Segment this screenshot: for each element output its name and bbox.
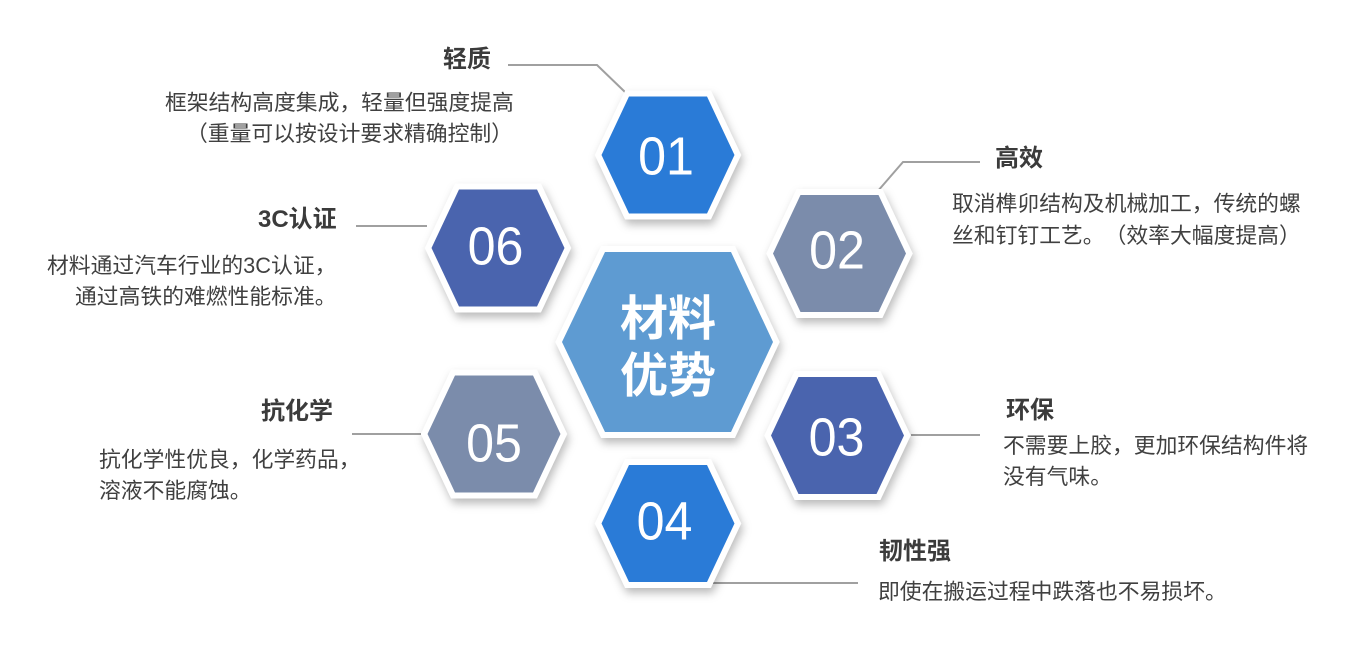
- text block 01: （重量可以按设计要求精确控制）: [186, 121, 513, 146]
- text block 04: 韧性强: [879, 538, 951, 565]
- leader line 01: [508, 65, 625, 92]
- central hexagon: 材料: [620, 293, 716, 346]
- hexagon 04: 04: [637, 492, 692, 552]
- hexagon 06: [432, 190, 564, 306]
- leader line 03: [911, 434, 980, 436]
- text block 05: [99, 398, 361, 503]
- leader line 06: [356, 225, 427, 227]
- text block 03: 环保: [1006, 397, 1054, 424]
- central hexagon: 优势: [620, 350, 716, 403]
- text block 01: 轻质: [443, 46, 491, 73]
- text block 02: 丝和钉钉工艺。（效率大幅度提高）: [952, 223, 1301, 248]
- text block 05: 抗化学: [261, 398, 333, 425]
- hexagon 03: 03: [809, 408, 864, 468]
- text block 05: 抗化学性优良，化学药品，: [99, 447, 361, 472]
- leader line 02: [877, 162, 980, 192]
- hexagon 01: 01: [638, 127, 694, 187]
- text block 02: 取消榫卯结构及机械加工，传统的螺: [952, 191, 1301, 216]
- leader line 05: [352, 433, 421, 435]
- text block 06: 3C认证: [258, 206, 337, 233]
- text block 06: [47, 206, 337, 309]
- leader line 04: [713, 582, 858, 584]
- text block 06: 通过高铁的难燃性能标准。: [75, 284, 337, 309]
- text block 02: [952, 145, 1301, 248]
- hexagon 01: [602, 96, 734, 214]
- hexagon 05: [428, 376, 560, 492]
- hexagon 02: [773, 195, 906, 312]
- central hexagon: [562, 252, 773, 432]
- hexagon 04: [602, 465, 734, 582]
- text block 01: [165, 46, 514, 146]
- hexagon 02: 02: [809, 221, 865, 281]
- text block 03: [1003, 397, 1308, 489]
- hexagon 06: 06: [468, 217, 523, 277]
- text block 01: 框架结构高度集成，轻量但强度提高: [165, 90, 514, 115]
- text block 06: 材料通过汽车行业的3C认证，: [47, 253, 336, 278]
- text block 04: [878, 538, 1227, 604]
- text block 05: 溶液不能腐蚀。: [99, 478, 252, 503]
- hexagon 05: 05: [466, 414, 522, 474]
- text block 02: 高效: [995, 145, 1043, 172]
- text block 03: 不需要上胶，更加环保结构件将: [1003, 433, 1308, 458]
- text block 04: 即使在搬运过程中跌落也不易损坏。: [878, 579, 1227, 604]
- text block 03: 没有气味。: [1003, 464, 1112, 489]
- hexagon 03: [771, 377, 904, 494]
